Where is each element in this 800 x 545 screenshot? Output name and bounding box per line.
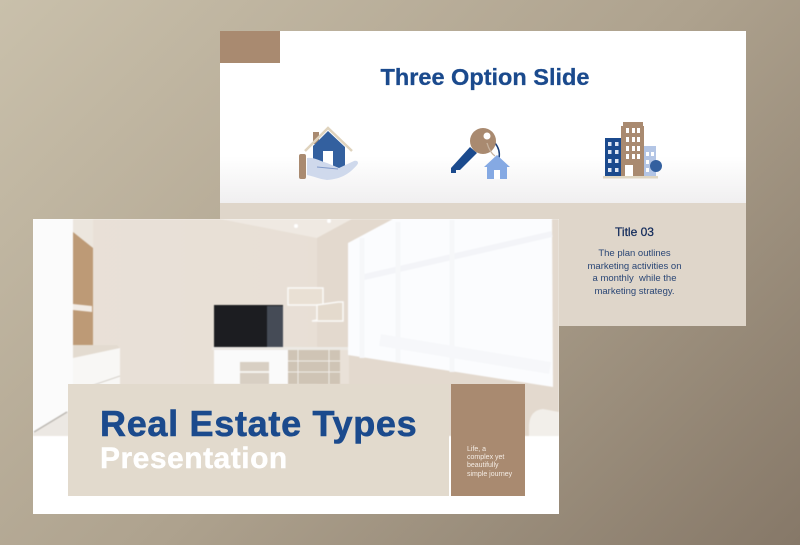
heading: title 03: Title 03 <box>615 225 654 239</box>
sofa cushion <box>529 409 559 436</box>
wood panel <box>73 232 93 345</box>
low white cabinet <box>73 345 120 358</box>
tagline text: simple journey <box>467 471 512 478</box>
brown corner block <box>220 31 280 63</box>
heading: three option slide: Three Option Slide <box>381 64 589 90</box>
tagline text: beautifully <box>467 462 499 469</box>
icon: key with house tag <box>451 128 510 179</box>
ceiling <box>220 219 352 238</box>
window <box>348 219 553 387</box>
tagline text: complex yet <box>467 454 504 461</box>
icon: city buildings <box>603 122 662 178</box>
panel: front slide <box>33 219 559 514</box>
tall white cabinet <box>33 219 73 436</box>
back wall <box>33 219 559 436</box>
subheading: presentation: Presentation <box>100 442 288 475</box>
media unit <box>214 350 288 384</box>
body text: marketing activities on <box>588 260 681 272</box>
icon: house in hand <box>299 126 358 180</box>
panel: title box <box>68 384 449 496</box>
tagline text: Life, a <box>467 446 486 453</box>
tv <box>214 305 283 348</box>
panel: brown tagline box <box>451 384 525 496</box>
right return wall <box>317 219 559 436</box>
panel: tan lower band <box>220 203 746 326</box>
body text: The plan outlines <box>598 248 671 259</box>
body text <box>588 248 681 296</box>
tagline text <box>467 446 512 478</box>
text block: title 03 <box>588 225 681 296</box>
photo: bright living room <box>33 219 559 436</box>
wall shelves <box>288 288 323 305</box>
body text: a monthly while the <box>593 273 676 284</box>
body text: marketing strategy. <box>594 286 675 296</box>
panel: back slide <box>220 31 746 326</box>
heading: real estate types: Real Estate Types <box>100 403 417 444</box>
